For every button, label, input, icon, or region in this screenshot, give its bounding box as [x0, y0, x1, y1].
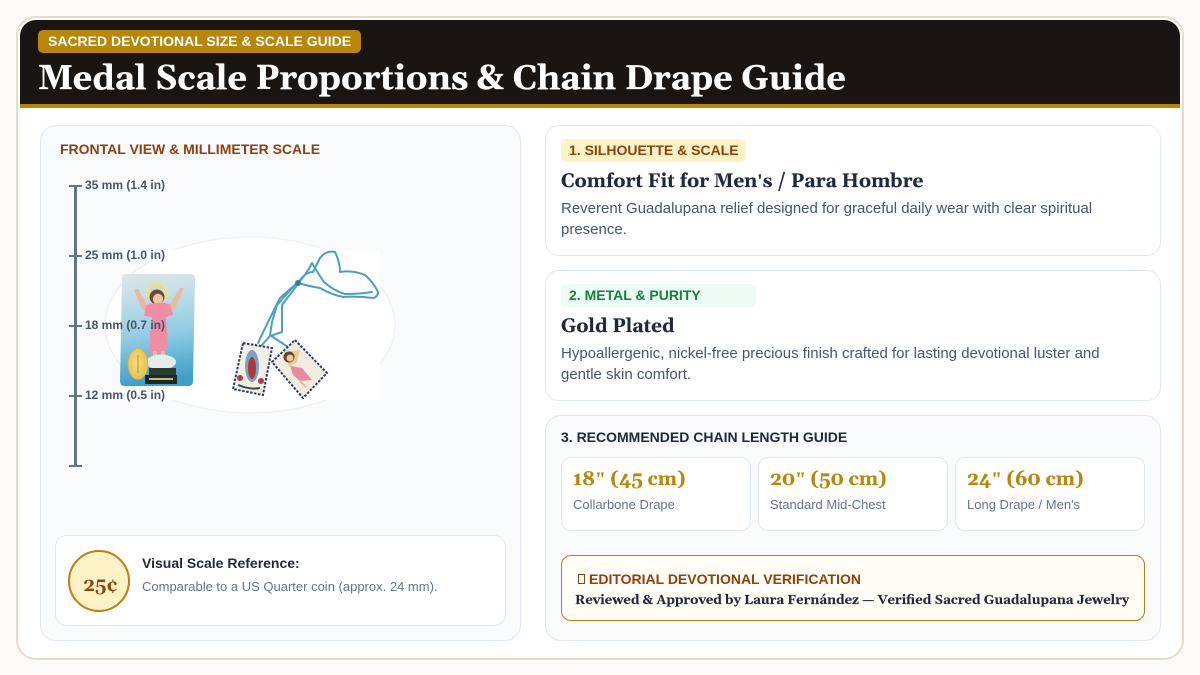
scale label: 35 mm: 35 mm (1.4 in)	[85, 178, 165, 192]
callout heading: EDITORIAL DEVOTIONAL VERIFICATION	[589, 571, 861, 587]
heading: Comfort Fit for Men's / Para Hombre	[561, 170, 923, 194]
description: Hypoallergenic, nickel-free precious finish crafted for lasting devotional luster and	[561, 345, 1100, 362]
header band	[20, 20, 1180, 108]
description	[561, 200, 1092, 238]
description	[561, 345, 1100, 383]
icon: scapular with blue cord	[233, 252, 378, 398]
icon: missing-glyph box	[578, 574, 585, 584]
chain option: 24 inch: 24" (60 cm)	[967, 468, 1083, 492]
chain option: 18 inch	[561, 457, 751, 531]
chain option: 18 inch: 18" (45 cm)	[573, 468, 685, 492]
title: Medal Scale Proportions & Chain Drape Guide	[38, 57, 846, 101]
badge	[561, 139, 746, 162]
header badge	[38, 30, 361, 53]
panel heading: FRONTAL VIEW & MILLIMETER SCALE	[60, 141, 320, 157]
card: silhouette and scale	[545, 125, 1161, 256]
icon: quarter coin	[68, 550, 130, 612]
header badge: SACRED DEVOTIONAL SIZE & SCALE GUIDE	[48, 33, 351, 49]
chain option: 20 inch: Standard Mid-Chest	[770, 497, 886, 512]
ruler axis	[74, 185, 77, 467]
heading: Gold Plated	[561, 315, 675, 339]
callout text: Reviewed & Approved by Laura Fernández — Verified Sacred Guadalupana Jewelry	[575, 593, 1129, 609]
chain option: 20 inch	[758, 457, 948, 531]
description: Reverent Guadalupana relief designed for graceful daily wear with clear spiritual	[561, 200, 1092, 217]
scapular back	[272, 340, 327, 398]
icon: quarter coin: 25¢	[83, 574, 118, 598]
chain guide heading: 3. RECOMMENDED CHAIN LENGTH GUIDE	[561, 429, 847, 445]
coin reference title: Visual Scale Reference:	[142, 555, 300, 571]
medal illustration	[104, 236, 396, 414]
description: gentle skin comfort.	[561, 366, 691, 383]
badge	[561, 284, 756, 307]
badge: 1. SILHOUETTE & SCALE	[569, 142, 739, 158]
icon: Divino Nino card	[120, 274, 195, 386]
scapular front	[233, 343, 272, 395]
chain option: 20 inch: 20" (50 cm)	[770, 468, 887, 492]
chain option: 24 inch	[955, 457, 1145, 531]
panel: chain length guide	[545, 415, 1161, 641]
chain option: 18 inch: Collarbone Drape	[573, 497, 675, 512]
chain option: 24 inch: Long Drape / Men's	[967, 497, 1080, 512]
millimeter ruler	[74, 187, 77, 465]
description: presence.	[561, 221, 627, 238]
scale label: 12 mm: 12 mm (0.5 in)	[85, 388, 165, 402]
scale label: 25 mm: 25 mm (1.0 in)	[85, 248, 165, 262]
card: metal and purity	[545, 270, 1161, 401]
coin reference card	[55, 535, 506, 626]
coin reference text: Comparable to a US Quarter coin (approx. 24 mm).	[142, 579, 438, 594]
scale label: 18 mm: 18 mm (0.7 in)	[85, 318, 165, 332]
badge: 2. METAL & PURITY	[569, 287, 701, 303]
panel: frontal view and millimeter scale	[40, 125, 521, 641]
callout: editorial verification	[561, 555, 1145, 621]
